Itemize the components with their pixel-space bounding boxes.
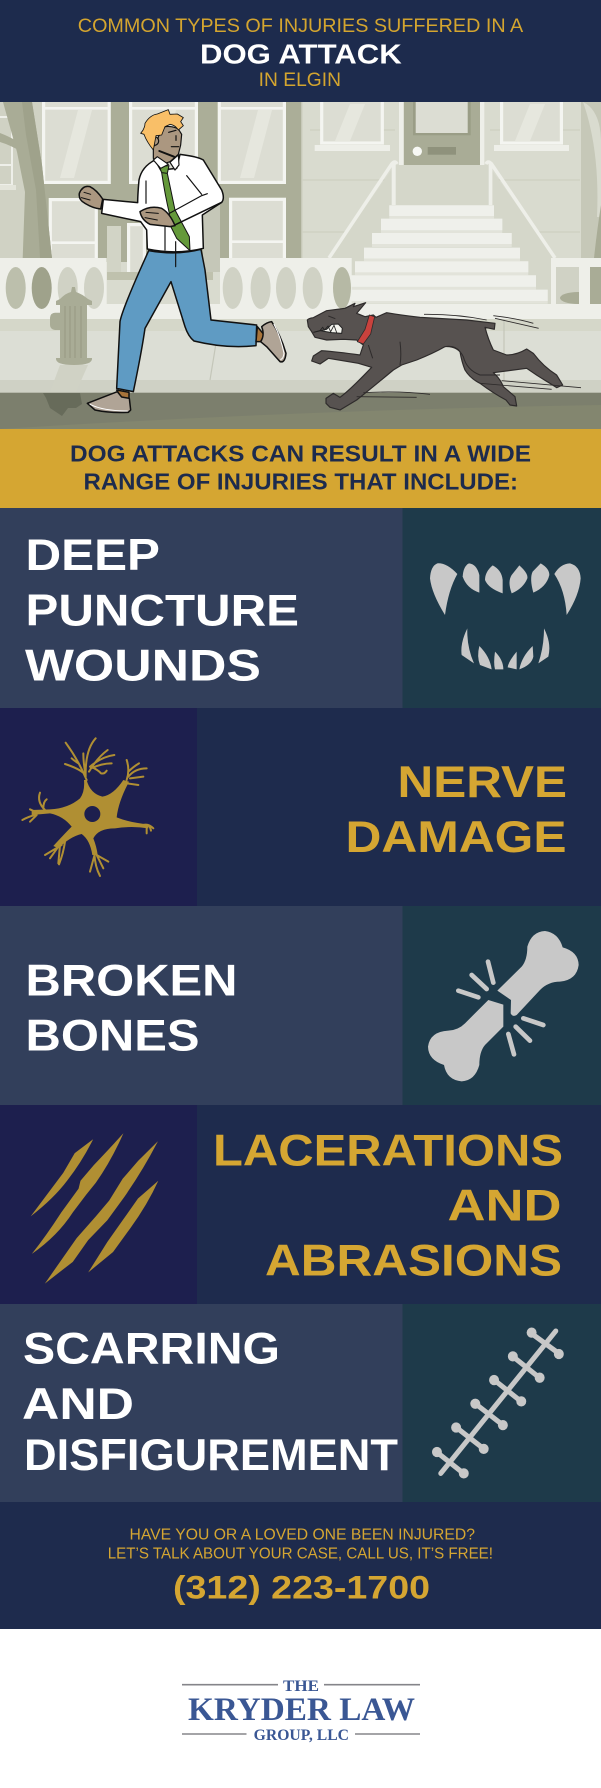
logo: the: THE	[283, 1678, 319, 1695]
tie	[159, 166, 190, 251]
man running	[79, 110, 286, 413]
logo: group, llc: GROUP, LLC	[254, 1727, 349, 1744]
label: ABRASIONS	[265, 1237, 562, 1286]
logo: The Kryder Law Group, LLC	[182, 1678, 420, 1744]
label: BROKEN	[26, 957, 237, 1006]
label: BONES	[26, 1012, 200, 1061]
hair	[141, 110, 183, 150]
label: WOUNDS	[25, 642, 261, 691]
label: SCARRING	[23, 1324, 280, 1373]
panel: deep puncture wounds	[0, 508, 601, 708]
icon: stitches	[432, 1327, 564, 1479]
sidewalk and road	[0, 319, 601, 430]
header	[0, 0, 601, 102]
street background	[0, 98, 601, 430]
label: DEEP	[26, 531, 160, 580]
panel: scarring and disfigurement	[0, 1304, 601, 1502]
snarling teeth	[313, 324, 342, 333]
banner line 2: RANGE OF INJURIES THAT INCLUDE:	[84, 469, 518, 495]
right shoe	[261, 322, 286, 362]
label	[22, 1324, 398, 1480]
door	[404, 102, 480, 205]
trousers	[117, 249, 257, 392]
label	[346, 758, 567, 862]
hydrant shadow	[43, 393, 82, 416]
hands	[79, 186, 175, 227]
banner line 1: DOG ATTACKS CAN RESULT IN A WIDE	[70, 441, 531, 467]
panel: nerve damage	[0, 708, 601, 906]
label: PUNCTURE	[26, 587, 299, 636]
neck and face	[153, 126, 182, 165]
panel: lacerations and abrasions	[0, 1105, 601, 1304]
label	[25, 531, 299, 691]
phone number: (312) 223-1700	[173, 1569, 430, 1605]
left shoe	[87, 392, 131, 413]
dog	[307, 303, 581, 410]
label	[26, 957, 237, 1061]
icon: neuron	[22, 738, 153, 876]
red collar	[357, 315, 375, 344]
stairs	[329, 165, 555, 304]
header line 1: COMMON TYPES OF INJURIES SUFFERED IN A	[78, 16, 524, 37]
question line: HAVE YOU OR A LOVED ONE BEEN INJURED?	[130, 1526, 475, 1543]
footer call to action	[0, 1502, 601, 1629]
icon: broken bone	[428, 931, 579, 1081]
shirt	[102, 154, 223, 252]
header line 3: IN ELGIN	[259, 70, 341, 91]
logo: kryder law: KRYDER LAW	[188, 1692, 415, 1728]
label	[213, 1127, 563, 1286]
label: AND	[448, 1182, 562, 1231]
collar	[153, 155, 179, 170]
dog body	[307, 303, 563, 410]
label: DAMAGE	[346, 813, 566, 862]
icon: claw scratches	[31, 1133, 158, 1284]
gold banner	[0, 429, 601, 508]
panel: broken bones	[0, 906, 601, 1105]
icon: fangs	[430, 563, 581, 669]
label: AND	[22, 1380, 134, 1429]
balustrades	[0, 258, 601, 319]
label: LACERATIONS	[213, 1127, 563, 1176]
label: DISFIGUREMENT	[24, 1431, 398, 1480]
label: NERVE	[398, 758, 567, 807]
socks	[117, 327, 264, 399]
header title: DOG ATTACK	[200, 38, 402, 69]
hydrant	[43, 287, 92, 416]
fur lines and speed lines	[328, 316, 500, 375]
invitation line: LET’S TALK ABOUT YOUR CASE, CALL US, IT’S FREE!	[108, 1545, 493, 1562]
